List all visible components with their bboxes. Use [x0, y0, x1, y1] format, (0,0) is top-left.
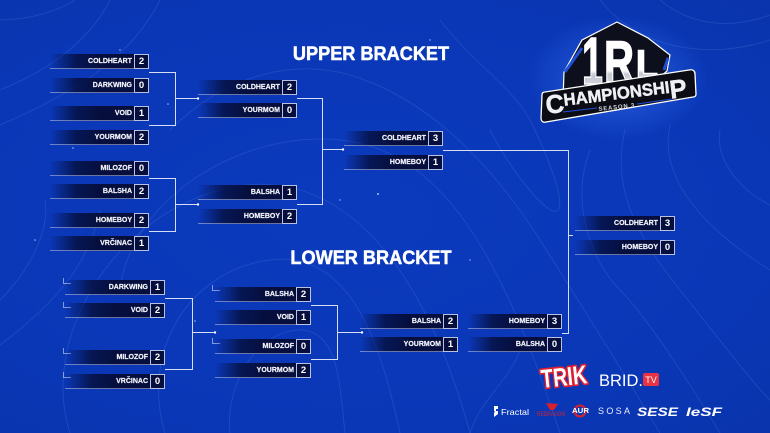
panel: upper bracket round 1: 1	[139, 108, 144, 119]
logo: Brid.TV: TV	[645, 375, 657, 385]
panel: lower bracket round 1: VOID	[131, 307, 148, 314]
panel: lower bracket round 3: 2	[448, 316, 453, 327]
logo: Trik: TRIK	[539, 359, 589, 394]
panel: upper bracket round 1: MILOZOF	[100, 165, 132, 172]
logo: Brid.TV: BRID.	[599, 371, 643, 390]
panel: lower bracket round 3	[360, 314, 458, 352]
logo: 1RL Championship Season 3: C	[544, 88, 566, 120]
panel: grand final: HOMEBOY	[622, 244, 658, 251]
panel: upper bracket round 1: 1	[139, 238, 144, 249]
panel: upper bracket final: COLDHEART	[382, 135, 426, 142]
panel: lower bracket round 2	[215, 287, 311, 378]
heading: upper bracket: UPPER BRACKET	[293, 43, 449, 65]
panel: upper bracket round 1: COLDHEART	[88, 58, 132, 65]
panel: upper bracket round 2: 2	[287, 82, 292, 93]
panel: upper bracket round 2: BALSHA	[251, 189, 280, 196]
panel: lower bracket round 1: 2	[155, 352, 160, 363]
panel: upper bracket round 1: BALSHA	[103, 188, 132, 195]
logo: IESF: IeSF	[686, 405, 723, 419]
panel: lower bracket round 2: 2	[301, 289, 306, 300]
panel: upper bracket round 1: 2	[139, 132, 144, 143]
panel: lower bracket round 3: YOURMOM	[404, 341, 441, 348]
panel: lower bracket round 3: BALSHA	[412, 318, 441, 325]
panel: lower bracket round 2: YOURMOM	[257, 367, 294, 374]
panel: upper bracket round 1: DARKWING	[93, 82, 132, 89]
panel: upper bracket round 1: HOMEBOY	[96, 217, 132, 224]
panel: upper bracket final: HOMEBOY	[390, 159, 426, 166]
panel: upper bracket round 2: COLDHEART	[236, 84, 280, 91]
panel: upper bracket round 1: 0	[139, 80, 144, 91]
panel: upper bracket round 1: YOURMOM	[95, 134, 132, 141]
logo: Redragon: REDRAGON	[537, 411, 565, 418]
panel: upper bracket round 1: 2	[139, 56, 144, 67]
logo: Fractal: Fractal	[501, 407, 529, 417]
logo: 1RL Championship Season 3: P	[668, 73, 688, 105]
panel: upper bracket round 1	[50, 54, 149, 251]
logo: SOSA: SOSA	[598, 406, 630, 416]
logo: 1RL Championship Season 3: L	[636, 43, 658, 87]
panel: lower bracket round 1: 2	[155, 305, 160, 316]
panel: grand final: COLDHEART	[614, 220, 658, 227]
panel: upper bracket round 1: VOID	[115, 110, 132, 117]
panel: upper bracket round 2: YOURMOM	[243, 107, 280, 114]
panel: lower bracket round 2: MILOZOF	[262, 343, 294, 350]
logo: SESE: SESE	[637, 405, 679, 419]
logo: AUR	[572, 406, 589, 416]
panel: upper bracket final: 3	[433, 133, 438, 144]
panel: lower bracket final	[468, 314, 562, 352]
panel: lower bracket round 1: 1	[155, 282, 160, 293]
panel: upper bracket round 1: 2	[139, 186, 144, 197]
panel: grand final	[575, 216, 675, 255]
panel: lower bracket round 1: DARKWING	[109, 284, 148, 291]
panel: lower bracket round 2: 0	[301, 341, 306, 352]
panel: lower bracket round 1: 0	[155, 376, 160, 387]
logo: Redragon	[537, 403, 565, 418]
panel: upper bracket round 2: 0	[287, 105, 292, 116]
panel: lower bracket round 2: 1	[301, 312, 306, 323]
panel: upper bracket final: 1	[433, 157, 438, 168]
panel: upper bracket round 2: 2	[287, 211, 292, 222]
panel: lower bracket final: 0	[552, 339, 557, 350]
panel: lower bracket round 1: VRČINAC	[116, 378, 148, 385]
panel: upper bracket round 2: HOMEBOY	[244, 213, 280, 220]
panel: upper bracket round 2	[198, 80, 297, 224]
panel: lower bracket final: HOMEBOY	[509, 318, 545, 325]
logo: Fractal	[494, 406, 529, 417]
logo: 1RL Championship Season 3: 1	[582, 24, 603, 99]
panel: lower bracket round 2: BALSHA	[265, 291, 294, 298]
panel: upper bracket round 1: 2	[139, 215, 144, 226]
panel: lower bracket round 2: VOID	[277, 314, 294, 321]
panel: lower bracket round 2: 2	[301, 365, 306, 376]
panel: lower bracket round 3: 1	[448, 339, 453, 350]
logo: 1RL Championship Season 3: R	[604, 30, 634, 95]
panel: lower bracket round 1	[65, 280, 165, 389]
panel: upper bracket round 1: VRČINAC	[100, 240, 132, 247]
panel: upper bracket round 1: 0	[139, 163, 144, 174]
logo: 1RL Championship Season 3: SEASON 3	[598, 103, 635, 113]
panel: upper bracket final	[344, 131, 443, 170]
logo: AUR: AUR	[572, 408, 589, 415]
panel: lower bracket final: BALSHA	[516, 341, 545, 348]
panel: grand final: 3	[665, 218, 670, 229]
logo: 1RL Championship Season 3: HAMPIONSHI	[562, 78, 671, 110]
panel: upper bracket round 2: 1	[287, 187, 292, 198]
heading: lower bracket: LOWER BRACKET	[290, 247, 452, 269]
panel: grand final: 0	[665, 242, 670, 253]
panel: lower bracket final: 3	[552, 316, 557, 327]
panel: lower bracket round 1: MILOZOF	[116, 354, 148, 361]
